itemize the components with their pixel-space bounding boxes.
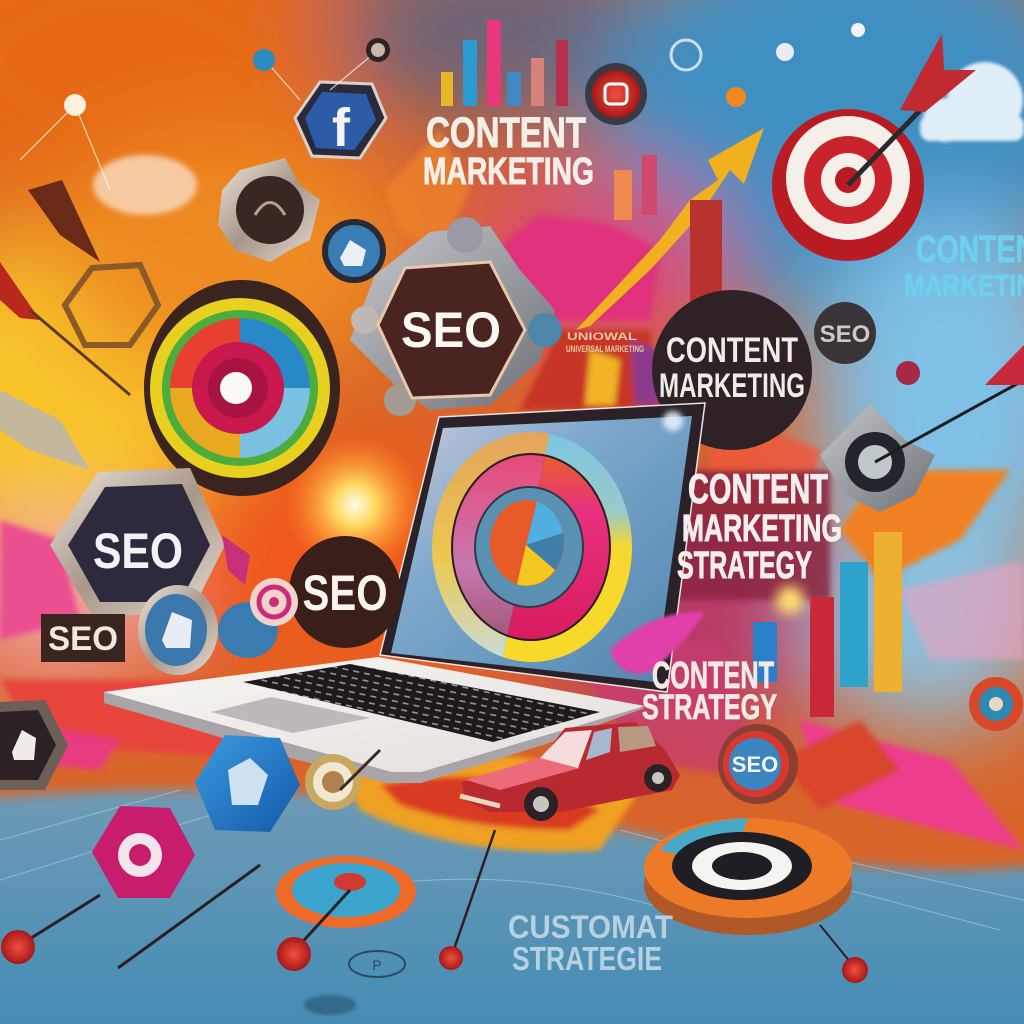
splash: pink brush beside screen — [610, 612, 705, 674]
icon: SEO gear: SEO — [401, 302, 501, 358]
laptop base — [104, 657, 645, 783]
floor — [0, 790, 1024, 1024]
icon: SEO dark circle: SEO — [302, 565, 388, 621]
icon: faint floor circle — [304, 951, 405, 1015]
laptop — [104, 403, 705, 783]
heading: content marketing strategy: STRATEGY — [677, 545, 812, 587]
label: SEO tag — [41, 614, 125, 662]
heading: customer strategy faded: STRATEGIE — [512, 940, 662, 977]
heading: customer strategy faded — [508, 909, 673, 977]
heading: content strategy — [642, 655, 777, 727]
icon: metal like ring — [138, 585, 278, 675]
icon: target with arrow top right — [772, 34, 976, 261]
small orange network nodes — [20, 23, 920, 385]
icon: SEO small circle — [718, 724, 798, 804]
icon: facebook hexagon — [295, 82, 386, 158]
icon: blue thumb circle — [322, 219, 386, 283]
icon: SEO hexagon left: SEO — [93, 523, 183, 579]
laptop screen — [391, 416, 692, 682]
icon: pink spiral — [222, 535, 298, 626]
heading: content strategy: CONTENT — [652, 655, 774, 697]
small garbled caption — [566, 331, 644, 354]
arrows: left dart — [0, 180, 130, 470]
screen glare — [663, 411, 683, 431]
icon: small hexagon ring — [65, 265, 158, 345]
bar chart: right — [753, 532, 902, 717]
callout: content marketing dark circle — [652, 290, 812, 450]
icon: small target medal — [305, 750, 380, 810]
icon: faint floor circle: P — [372, 957, 382, 973]
screen donut chart — [432, 432, 632, 662]
icon: blue hexagon social — [195, 735, 300, 832]
icon: target disc bottom right — [644, 818, 852, 935]
small garbled caption: UNIOWAL — [567, 331, 637, 343]
icon: small seo badge — [814, 302, 876, 364]
heading: content strategy: STRATEGY — [642, 688, 777, 727]
icon: car — [460, 722, 680, 821]
label: SEO tag: SEO — [48, 620, 118, 658]
icon: gear top — [218, 158, 320, 262]
rising arrow — [576, 128, 764, 330]
icon: SEO hexagon left — [50, 468, 225, 615]
trackpad — [211, 697, 370, 733]
callout: content marketing dark circle: CONTENT — [666, 331, 798, 370]
laptop screen frame — [380, 403, 705, 692]
heading: content marketing top: CONTENT — [426, 109, 586, 157]
keyboard — [243, 664, 600, 742]
small garbled caption: UNIVERSAL MARKETING — [566, 344, 644, 354]
icon: target disc bottom centre — [276, 856, 416, 928]
heading: customer strategy faded: CUSTOMAT — [508, 909, 673, 945]
icon: thumb hexagon bottom left — [0, 700, 68, 790]
cloud: top right — [920, 62, 1024, 142]
icon: SEO gear — [350, 217, 562, 416]
heading: content marketing strategy: CONTENT — [688, 465, 828, 512]
icon: small seo badge: SEO — [820, 321, 870, 348]
heading: content marketing top — [423, 109, 594, 193]
icon: facebook hexagon: f — [332, 98, 351, 158]
bar chart: top centre — [441, 20, 568, 106]
heading: content marketing strategy — [677, 465, 842, 587]
heading: content marketing right — [904, 229, 1024, 303]
icon: SEO dark circle — [289, 536, 401, 648]
donut chart: left rainbow — [144, 280, 340, 496]
paint splashes — [0, 130, 1024, 852]
icon: top badge — [585, 63, 647, 125]
icon: SEO small circle: SEO — [732, 752, 778, 777]
pins: red darts bottom — [1, 830, 868, 983]
icon: pink hexagon — [92, 806, 195, 898]
icon: gear with dart right — [820, 345, 1024, 512]
heading: content marketing strategy: MARKETING — [682, 508, 842, 550]
callout: content marketing dark circle: MARKETING — [659, 367, 805, 405]
icon: small target right — [969, 677, 1023, 731]
heading: content marketing top: MARKETING — [423, 151, 594, 193]
